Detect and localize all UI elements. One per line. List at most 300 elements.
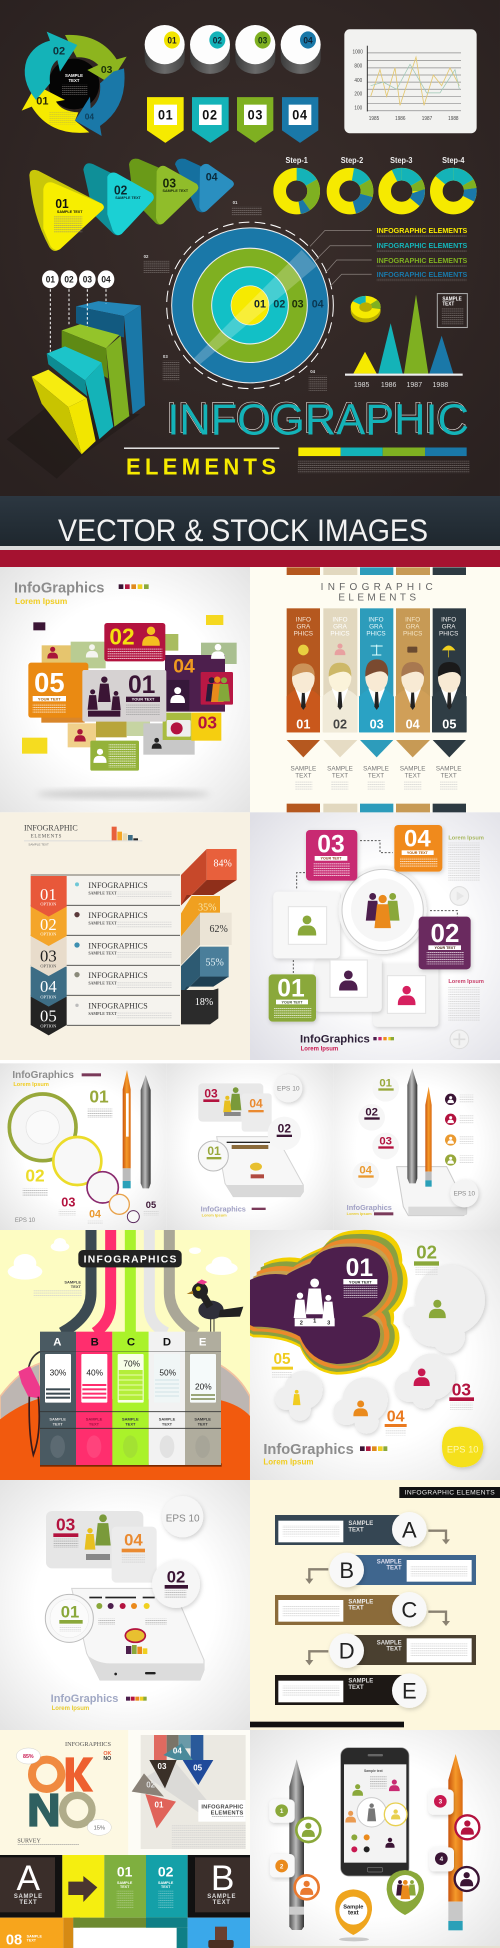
EPS badge: EPS 10 xyxy=(166,1513,200,1524)
phone xyxy=(72,1588,204,1680)
card 04: 04 xyxy=(173,657,195,678)
heading: ELEMENTS: ELEMENTS xyxy=(126,453,276,479)
pump columns: TEXT xyxy=(162,1421,173,1426)
option ribbons: 02 xyxy=(40,915,57,934)
tile 01: 01 xyxy=(117,1864,133,1880)
lower tiles: TEXT xyxy=(27,1939,37,1943)
ring callouts xyxy=(143,200,327,391)
fuel gauges: 40% xyxy=(86,1368,104,1378)
panel: OK NO survey xyxy=(0,1730,128,1855)
icon and label 02: 02 xyxy=(416,1241,437,1262)
speech cards: 04 xyxy=(249,1097,263,1111)
option rows: INFOGRAPHICS xyxy=(88,971,148,980)
tile 01 xyxy=(104,1855,146,1918)
panel: pen phone pencil xyxy=(250,1730,500,1948)
step donut charts: Step-3 xyxy=(390,156,413,165)
origami folds: 03 xyxy=(158,1762,167,1771)
column 01: PHICS xyxy=(294,630,313,637)
side notes xyxy=(448,835,484,1049)
pump columns: TEXT xyxy=(53,1421,63,1426)
tile A: TEXT xyxy=(19,1900,37,1906)
tile 02: TEXT xyxy=(161,1885,171,1889)
3D triangle arrows: 01 xyxy=(55,197,69,211)
row B xyxy=(305,1553,476,1587)
chevrons with sample text: SAMPLE xyxy=(400,765,426,772)
colour bar with caption xyxy=(298,447,469,474)
icon and label 04 xyxy=(353,1400,407,1435)
row A xyxy=(275,1512,450,1547)
title: Lorem Ipsum xyxy=(347,1211,372,1216)
callout 01: 01 xyxy=(61,1602,79,1621)
small title: OK xyxy=(103,1751,111,1757)
coloured strips xyxy=(62,1230,197,1333)
option rows: INFOGRAPHICS xyxy=(88,881,148,890)
option rows: SAMPLE TEXT xyxy=(88,951,117,956)
tile 02 xyxy=(146,1855,188,1918)
pump columns: SAMPLE xyxy=(159,1416,176,1421)
fuel gauges: 70% xyxy=(123,1359,141,1369)
tile A xyxy=(0,1855,62,1918)
numbered circles: 03 xyxy=(379,1135,392,1147)
icon and label 04: 04 xyxy=(387,1408,405,1425)
option ribbons: OPTION xyxy=(40,931,57,936)
legend: infographic elements labels: INFOGRAPHIC ELEMENTS xyxy=(377,270,467,279)
speech cards xyxy=(46,1511,157,1583)
legend: infographic elements labels: INFOGRAPHIC ELEMENTS xyxy=(377,256,467,265)
card 01 content: 2 xyxy=(300,1321,303,1327)
heading: INFOGRAPHIC: INFOGRAPHIC xyxy=(165,394,467,443)
word NO xyxy=(17,1793,111,1846)
title xyxy=(14,580,149,606)
line chart card: 1987 xyxy=(422,116,432,122)
column 03: GRA xyxy=(369,623,384,630)
column 05: GRA xyxy=(442,623,456,630)
origami ribbons xyxy=(147,1735,207,1813)
card 01 content: 01 xyxy=(346,1255,373,1282)
cylinder number buttons: 04 xyxy=(303,35,313,46)
pump columns: SAMPLE xyxy=(49,1416,66,1421)
column 04 xyxy=(395,608,430,732)
white cloud 05 xyxy=(275,1371,323,1421)
concentric ring chart: 01 xyxy=(254,298,266,311)
origami folds: 04 xyxy=(173,1746,182,1755)
line chart card: 1988 xyxy=(448,116,459,122)
title: Lorem Ipsum xyxy=(15,596,67,606)
speech cards xyxy=(198,1083,272,1132)
step donut charts xyxy=(280,156,470,208)
line chart card: 200 xyxy=(354,92,363,98)
column 04: GRA xyxy=(406,623,420,630)
option rows xyxy=(31,875,180,1025)
pentagon tags: 04 xyxy=(292,107,308,123)
speech cards: 03 xyxy=(56,1515,76,1535)
column 03 xyxy=(359,608,394,732)
icon and label 05: 05 xyxy=(273,1351,291,1368)
concentric ring chart: 02 xyxy=(273,298,285,311)
card 01 xyxy=(82,670,166,722)
title: InfoGraphics xyxy=(201,1205,246,1214)
small title: INFOGRAPHICS xyxy=(65,1741,112,1748)
speech cards: 03 xyxy=(204,1087,218,1101)
percent blocks: 35% xyxy=(198,903,216,914)
heading: INFOGRAPHIC: INFOGRAPHIC xyxy=(167,396,469,445)
small title: NO xyxy=(103,1756,111,1762)
title and mini chart: INFOGRAPHIC xyxy=(24,823,78,832)
row A: A xyxy=(402,1517,417,1542)
option ribbons: 04 xyxy=(40,977,57,996)
column 05: INFO xyxy=(441,616,456,623)
card 03: YOUR TEXT xyxy=(321,857,342,861)
colour strips xyxy=(287,567,466,813)
card 01 xyxy=(269,974,316,1022)
left pen callouts: 2 xyxy=(280,1863,284,1870)
chevrons with sample text: TEXT xyxy=(295,772,312,779)
pen xyxy=(407,1068,417,1183)
clouds xyxy=(8,1238,238,1280)
tile A: A xyxy=(17,1859,41,1898)
column 03: INFO xyxy=(368,616,384,623)
numbered circles: 01 xyxy=(379,1078,392,1090)
step numbers xyxy=(15,1086,159,1225)
panel: purple cloud infographic xyxy=(250,1230,500,1480)
title xyxy=(347,1203,393,1216)
panel: phone infographic large xyxy=(0,1480,250,1730)
card 01: 01 xyxy=(128,672,156,699)
pump columns: SAMPLE xyxy=(122,1416,139,1421)
option rows: SAMPLE TEXT xyxy=(88,890,117,895)
option rows: SAMPLE TEXT xyxy=(88,980,117,985)
tile B xyxy=(188,1855,250,1918)
option ribbons: OPTION xyxy=(40,1023,57,1028)
yellow map pin: Sample xyxy=(343,1904,363,1910)
cylinder number buttons: 02 xyxy=(213,35,222,46)
icon and label 03 xyxy=(414,1369,474,1410)
title: InfoGraphics xyxy=(12,1070,74,1081)
card 03: 03 xyxy=(317,832,345,859)
banner: vector and stock images: VECTOR & STOCK IMAGES xyxy=(58,512,428,548)
callout 02: 02 xyxy=(167,1567,185,1586)
circular arrows diagram: 01 xyxy=(36,95,48,107)
tile B: B xyxy=(211,1859,234,1898)
title pill: INFOGRAPHICS xyxy=(84,1255,176,1266)
tile 02: SAMPLE xyxy=(158,1881,174,1885)
small title xyxy=(65,1741,112,1762)
pentagon tags: 02 xyxy=(202,107,218,123)
cylinder number buttons: 03 xyxy=(258,35,267,46)
arrow tile xyxy=(62,1855,104,1918)
step numbers: 03 xyxy=(61,1195,75,1209)
card 01: YOUR TEXT xyxy=(282,1000,303,1004)
row C xyxy=(275,1592,450,1627)
column 01: 01 xyxy=(296,717,310,731)
step donut charts: Step-2 xyxy=(341,156,363,165)
card 01 content xyxy=(294,1255,377,1327)
origami folds: 01 xyxy=(155,1801,164,1810)
triangle bar chart xyxy=(345,295,463,389)
word NO: SURVEY xyxy=(17,1838,41,1844)
percent blocks: 18% xyxy=(195,997,213,1008)
callout 02 xyxy=(268,1117,301,1150)
card 01 content: YOUR TEXT xyxy=(349,1279,372,1284)
title block xyxy=(172,1800,246,1849)
small 3D donut xyxy=(351,299,381,322)
chevrons with sample text xyxy=(287,740,466,791)
white cloud 04 xyxy=(333,1377,388,1434)
lower tiles xyxy=(0,1918,250,1948)
line chart card: 400 xyxy=(354,78,363,84)
card 04 xyxy=(165,655,233,712)
background tiles xyxy=(22,615,237,755)
chevrons with sample text: SAMPLE xyxy=(436,765,462,772)
3D bar chart: 03 xyxy=(83,274,92,285)
card 04 xyxy=(394,825,442,872)
white cloud 03 xyxy=(395,1353,455,1409)
row C: SAMPLE xyxy=(348,1599,373,1605)
EPS badge: EPS 10 xyxy=(277,1086,300,1093)
icon and label 05 xyxy=(272,1351,300,1405)
panel: origami steps xyxy=(128,1730,250,1855)
hills xyxy=(0,1363,250,1480)
callout 02: 02 xyxy=(278,1122,291,1136)
3D triangle arrows: 02 xyxy=(114,183,127,197)
yellow map pin xyxy=(335,1889,372,1941)
3D bar chart: 02 xyxy=(64,274,74,285)
numbered circles xyxy=(352,1075,399,1188)
yellow map pin: text xyxy=(348,1911,359,1917)
right pencil callouts: 4 xyxy=(440,1856,444,1863)
line chart card: 1985 xyxy=(369,116,379,122)
card green xyxy=(90,741,139,771)
column 03: PHICS xyxy=(366,630,386,637)
pencil xyxy=(123,1070,131,1188)
pentagon tags xyxy=(147,97,318,143)
chevrons with sample text: TEXT xyxy=(441,772,457,779)
numbered circles: 04 xyxy=(359,1164,373,1176)
circular arrows diagram: TEXT xyxy=(68,78,80,83)
row E xyxy=(275,1673,427,1708)
phone xyxy=(217,1137,303,1197)
title: Lorem Ipsum xyxy=(52,1706,89,1712)
row E: E xyxy=(402,1679,417,1704)
pump columns: SAMPLE xyxy=(86,1416,103,1421)
fuel gauges: 20% xyxy=(195,1382,212,1392)
tile 01: TEXT xyxy=(120,1885,130,1889)
ring callouts: 01 xyxy=(233,200,238,205)
column 01 xyxy=(287,608,320,732)
sample text box xyxy=(437,294,467,327)
option ribbons: OPTION xyxy=(40,901,57,906)
column 04: 04 xyxy=(406,717,420,731)
speech cards: 04 xyxy=(124,1531,143,1550)
title and mini chart xyxy=(24,823,142,846)
option ribbons: 03 xyxy=(40,946,57,965)
right pencil callouts xyxy=(428,1789,479,1891)
card 01: YOUR TEXT xyxy=(132,697,155,702)
card 02 xyxy=(419,917,471,969)
sample text box: TEXT xyxy=(442,302,454,308)
row C: TEXT xyxy=(348,1605,364,1611)
chevrons with sample text: TEXT xyxy=(332,772,348,779)
option rows: SAMPLE TEXT xyxy=(88,920,117,925)
title and mini chart: SAMPLE TEXT xyxy=(28,842,49,846)
title block: INFOGRAPHIC xyxy=(201,1804,243,1810)
word NO: 15% xyxy=(94,1825,105,1831)
circular arrows diagram: 02 xyxy=(53,45,65,57)
smartphone xyxy=(341,1748,409,1876)
callout 01 xyxy=(45,1594,93,1642)
title: InfoGraphics xyxy=(14,580,104,596)
step numbers: 02 xyxy=(25,1166,45,1186)
option ribbons: 05 xyxy=(40,1006,57,1025)
chevrons with sample text: SAMPLE xyxy=(363,765,389,772)
3D bar chart: 04 xyxy=(101,274,111,285)
title xyxy=(263,1442,387,1466)
panel: options and percent blocks xyxy=(0,812,250,1060)
EPS badge: EPS 10 xyxy=(454,1190,476,1197)
3D triangle arrows: SAMPLE TEXT xyxy=(163,189,189,193)
card 02 xyxy=(104,623,165,661)
panel: people circle with numbered cards xyxy=(250,812,500,1060)
percent blocks: 55% xyxy=(206,957,224,968)
pentagon tags: 01 xyxy=(158,107,173,123)
step donut charts: Step-4 xyxy=(442,156,465,165)
EPS badge xyxy=(450,1179,478,1207)
3D triangle arrows: 03 xyxy=(163,176,176,191)
column 04: PHICS xyxy=(403,630,422,637)
callout 01: 01 xyxy=(207,1144,221,1158)
column 02: GRA xyxy=(333,623,348,630)
chevrons with sample text: TEXT xyxy=(405,772,421,779)
legend: infographic elements labels xyxy=(310,226,467,286)
line chart card: 1000 xyxy=(352,49,363,56)
callout 01 xyxy=(198,1141,228,1171)
row D xyxy=(305,1633,476,1668)
title: Lorem Ipsum xyxy=(263,1457,313,1466)
column 02 xyxy=(323,608,357,732)
header tag xyxy=(399,1487,500,1498)
triangle bar chart: 1986 xyxy=(381,380,396,389)
line chart card: 800 xyxy=(354,63,363,70)
icon list xyxy=(445,1094,473,1166)
panel: A to E flow xyxy=(250,1480,500,1730)
ring callouts: 04 xyxy=(310,369,316,374)
card 03 xyxy=(306,830,357,881)
line chart card: 1986 xyxy=(395,116,406,122)
title: InfoGraphics xyxy=(263,1442,354,1458)
pump columns: TEXT xyxy=(89,1421,100,1426)
ring callouts: 03 xyxy=(163,354,168,359)
tile 01: SAMPLE xyxy=(117,1881,133,1885)
card 02: 02 xyxy=(431,918,459,948)
row E: SAMPLE xyxy=(348,1679,373,1685)
title and mini chart: ELEMENTS xyxy=(31,834,62,839)
pump columns: E xyxy=(199,1336,207,1348)
legend: infographic elements labels: INFOGRAPHIC ELEMENTS xyxy=(377,226,467,235)
option ribbons xyxy=(31,876,67,1035)
option ribbons: 01 xyxy=(40,885,57,904)
title: ELEMENTS xyxy=(338,593,416,604)
circular arrows diagram xyxy=(22,32,127,136)
column 05 xyxy=(432,608,467,732)
step donut charts: Step-1 xyxy=(285,156,308,165)
percent blocks: 84% xyxy=(214,859,232,870)
title block: ELEMENTS xyxy=(211,1811,244,1817)
title xyxy=(300,1033,394,1053)
card 02: YOUR TEXT xyxy=(435,946,456,950)
header tag: INFOGRAPHIC ELEMENTS xyxy=(405,1490,495,1497)
option ribbons: OPTION xyxy=(40,994,57,999)
origami folds: 05 xyxy=(193,1763,203,1772)
left pen callouts: 1 xyxy=(280,1808,284,1815)
legend: infographic elements labels: INFOGRAPHIC ELEMENTS xyxy=(377,241,467,250)
row B: TEXT xyxy=(386,1565,402,1571)
option rows: SAMPLE TEXT xyxy=(88,1011,117,1016)
card 01 content: 3 xyxy=(327,1321,330,1327)
column 05: 05 xyxy=(442,717,456,731)
card 03 xyxy=(47,644,225,749)
percent blocks: 62% xyxy=(210,924,228,935)
row D: SAMPLE xyxy=(377,1641,402,1647)
central people circle xyxy=(339,866,427,954)
EPS badge: EPS 10 xyxy=(447,1444,478,1454)
row A: SAMPLE xyxy=(348,1521,373,1527)
concentric ring chart xyxy=(167,222,333,389)
title: Lorem Ipsum xyxy=(301,1047,338,1053)
card 04: YOUR TEXT xyxy=(407,851,429,855)
3D triangle arrows: 04 xyxy=(206,171,218,183)
lower tiles: SAMPLE xyxy=(27,1934,42,1938)
panel: layered cards infographic xyxy=(0,567,250,812)
cylinder number buttons xyxy=(145,25,321,74)
title xyxy=(321,582,433,604)
3D bar chart: 01 xyxy=(46,274,55,285)
chevrons with sample text: SAMPLE xyxy=(327,765,353,772)
3D bar chart xyxy=(7,270,145,479)
option rows: INFOGRAPHICS xyxy=(88,941,148,950)
EPS badge xyxy=(274,1074,302,1102)
cylinder number buttons: 01 xyxy=(167,35,177,46)
percent blocks xyxy=(181,849,237,1024)
right pencil callouts: 3 xyxy=(439,1799,443,1806)
card 02: 02 xyxy=(109,624,135,650)
pump columns: B xyxy=(91,1336,99,1348)
3D triangle arrows: SAMPLE TEXT xyxy=(57,210,83,214)
card 01: 01 xyxy=(277,976,305,1003)
column 02: 02 xyxy=(333,717,347,731)
panel: dark infographic elements xyxy=(0,0,500,497)
option rows: INFOGRAPHICS xyxy=(88,911,148,920)
sample note: SAMPLE xyxy=(64,1280,81,1285)
EPS badge xyxy=(162,1496,203,1537)
3D triangle arrows: SAMPLE TEXT xyxy=(115,196,141,200)
nested circles xyxy=(9,1094,139,1223)
pump columns xyxy=(40,1332,222,1467)
white squares with icons xyxy=(273,892,438,1027)
card 05 xyxy=(28,663,88,718)
pump columns: A xyxy=(53,1336,61,1348)
step numbers: 05 xyxy=(146,1200,156,1210)
concentric ring chart: 03 xyxy=(292,298,304,311)
icon and label 03: 03 xyxy=(452,1379,471,1399)
tile 02: 02 xyxy=(158,1864,174,1880)
column 02: INFO xyxy=(332,616,348,623)
dashed connectors xyxy=(293,841,457,973)
pump columns: C xyxy=(127,1336,135,1348)
title: InfoGraphics xyxy=(347,1203,392,1212)
pen xyxy=(289,1759,304,1930)
ring callouts: 02 xyxy=(144,254,149,259)
pentagon tags: 03 xyxy=(248,107,263,123)
